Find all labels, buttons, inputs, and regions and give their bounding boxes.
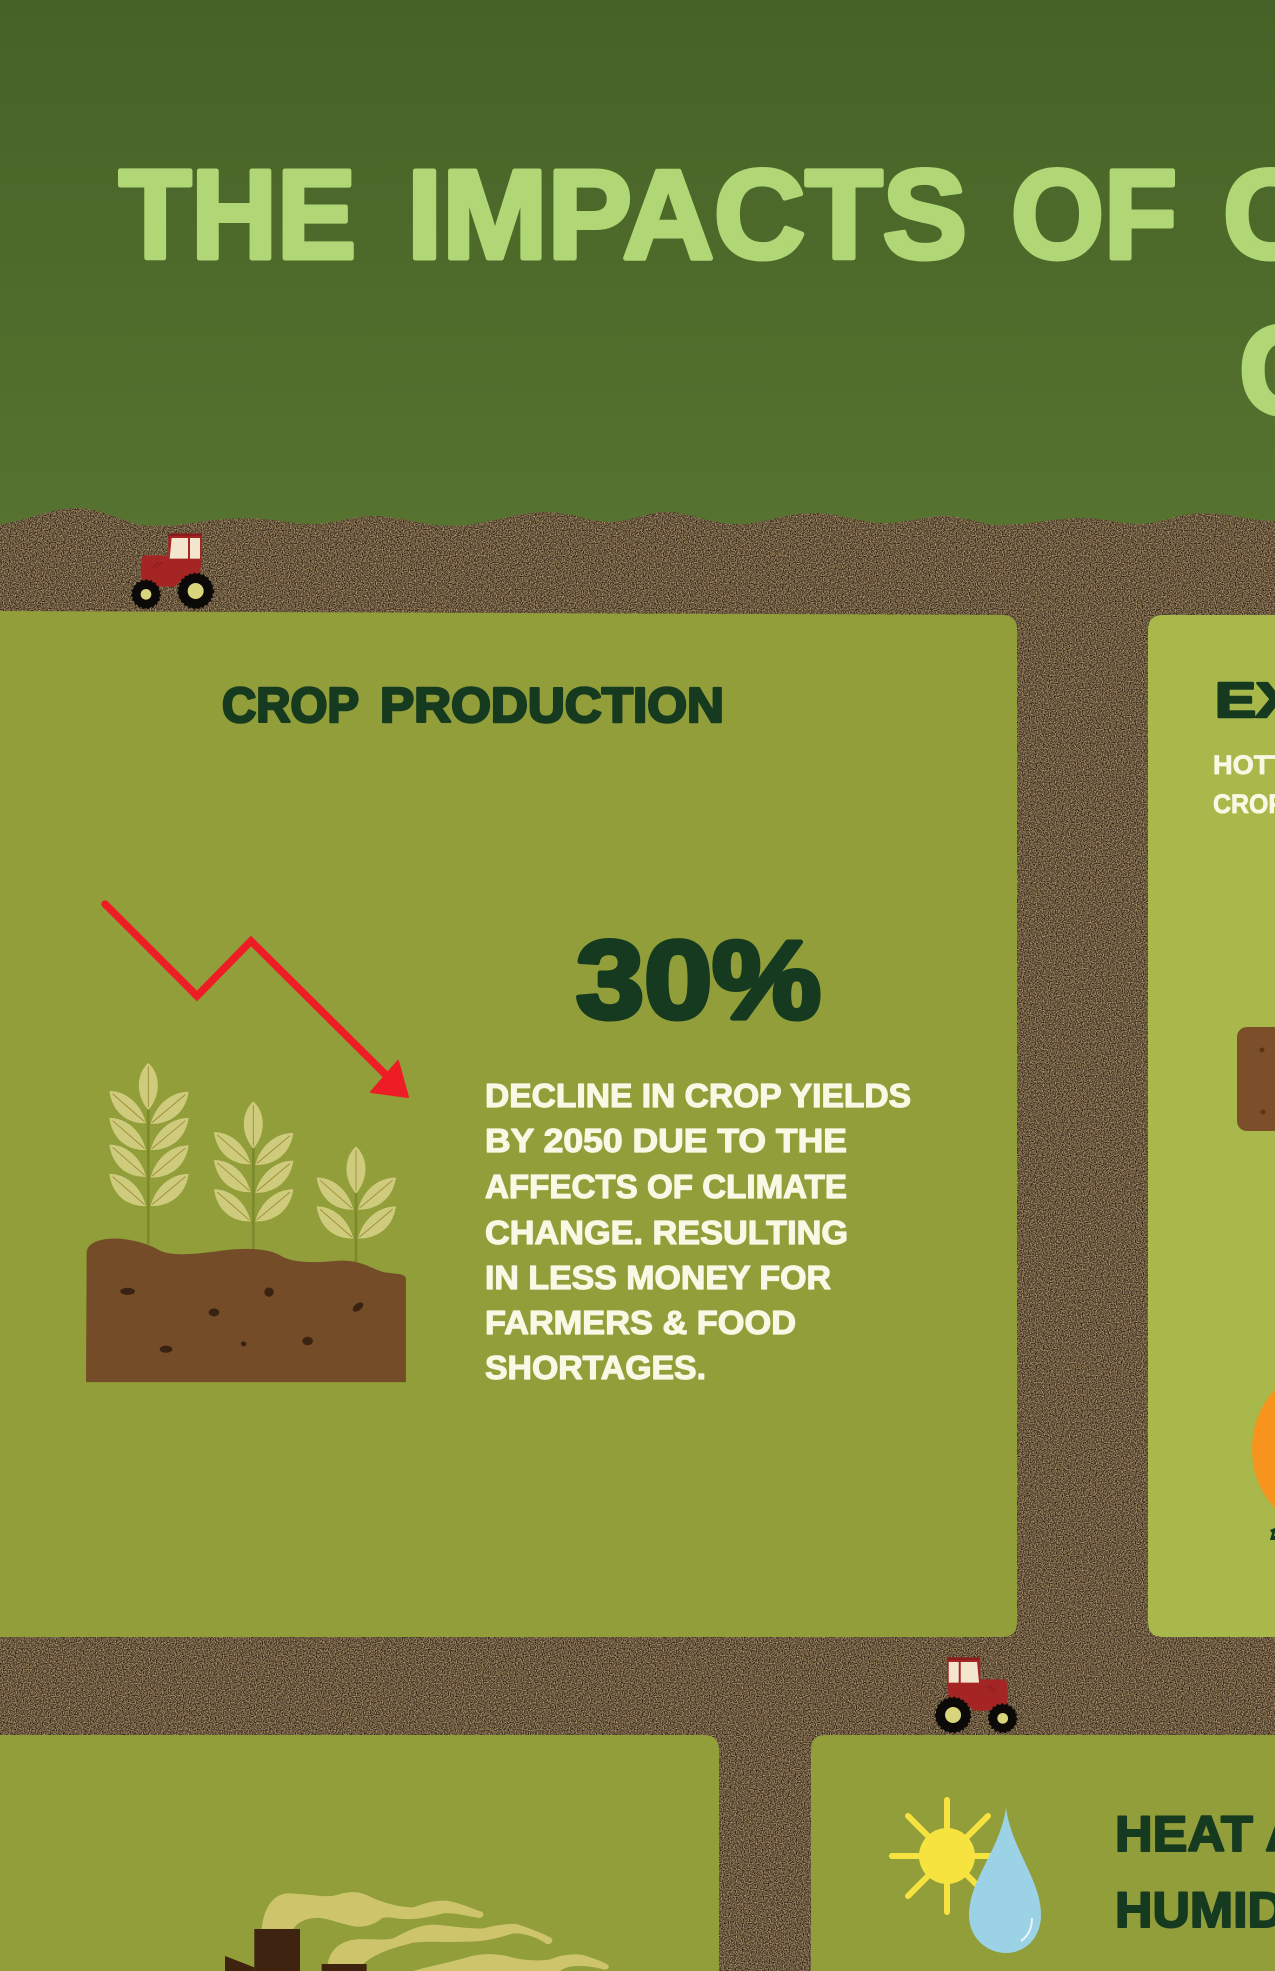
- panel text: [1213, 750, 1275, 819]
- stat description: [485, 1077, 911, 1386]
- tractor bottom: [936, 1657, 1017, 1732]
- smoke: [262, 1892, 609, 1971]
- panel: bottom left factory card: [0, 1735, 719, 1971]
- panel: crop production: [0, 611, 1017, 1637]
- stat description: CHANGE. RESULTING: [485, 1214, 848, 1251]
- statistic: 30%: 30%: [576, 919, 821, 1042]
- title: OF: [1011, 144, 1177, 285]
- panel background: [0, 611, 1017, 1637]
- plant 3: [317, 1146, 396, 1262]
- small dark mark: [1270, 1528, 1275, 1540]
- stat description: DECLINE IN CROP YIELDS: [485, 1077, 911, 1114]
- stones: [120, 1287, 365, 1353]
- stat description: FARMERS & FOOD: [485, 1304, 796, 1341]
- icon: sun: [892, 1800, 992, 1912]
- plants in soil illustration: [86, 1063, 406, 1382]
- stat description: SHORTAGES.: [485, 1349, 706, 1386]
- panel heading: PRODUCTION: [380, 679, 724, 733]
- panel heading: [222, 679, 724, 733]
- chimneys: [225, 1929, 367, 1971]
- stat description: AFFECTS OF CLIMATE: [485, 1168, 847, 1205]
- tractor top left: [132, 533, 213, 608]
- soil block: [1237, 1027, 1275, 1131]
- panel: heat and humidity: [811, 1735, 1275, 1971]
- panel heading: [1115, 1806, 1275, 1938]
- panel heading: HUMID: [1115, 1882, 1275, 1938]
- soil block: [86, 1239, 406, 1382]
- plant 1: [109, 1063, 189, 1245]
- stat description: BY 2050 DUE TO THE: [485, 1122, 847, 1159]
- soil background: [0, 500, 1275, 1971]
- title: THE: [119, 144, 356, 285]
- factory illustration: [225, 1892, 609, 1971]
- decline arrow: [105, 904, 408, 1097]
- icon: water drop: [969, 1808, 1041, 1953]
- panel: right extreme weather card: [1148, 615, 1275, 1637]
- panel heading: CROP: [222, 679, 359, 733]
- stat description: IN LESS MONEY FOR: [485, 1259, 831, 1296]
- panel background: [0, 1735, 719, 1971]
- orange sun: [1252, 1374, 1275, 1524]
- title: IMPACTS: [407, 144, 967, 285]
- sky header band: [0, 0, 1275, 526]
- plant 2: [214, 1101, 293, 1250]
- panel background: [811, 1735, 1275, 1971]
- title: [119, 144, 1275, 441]
- panel background: [1148, 615, 1275, 1637]
